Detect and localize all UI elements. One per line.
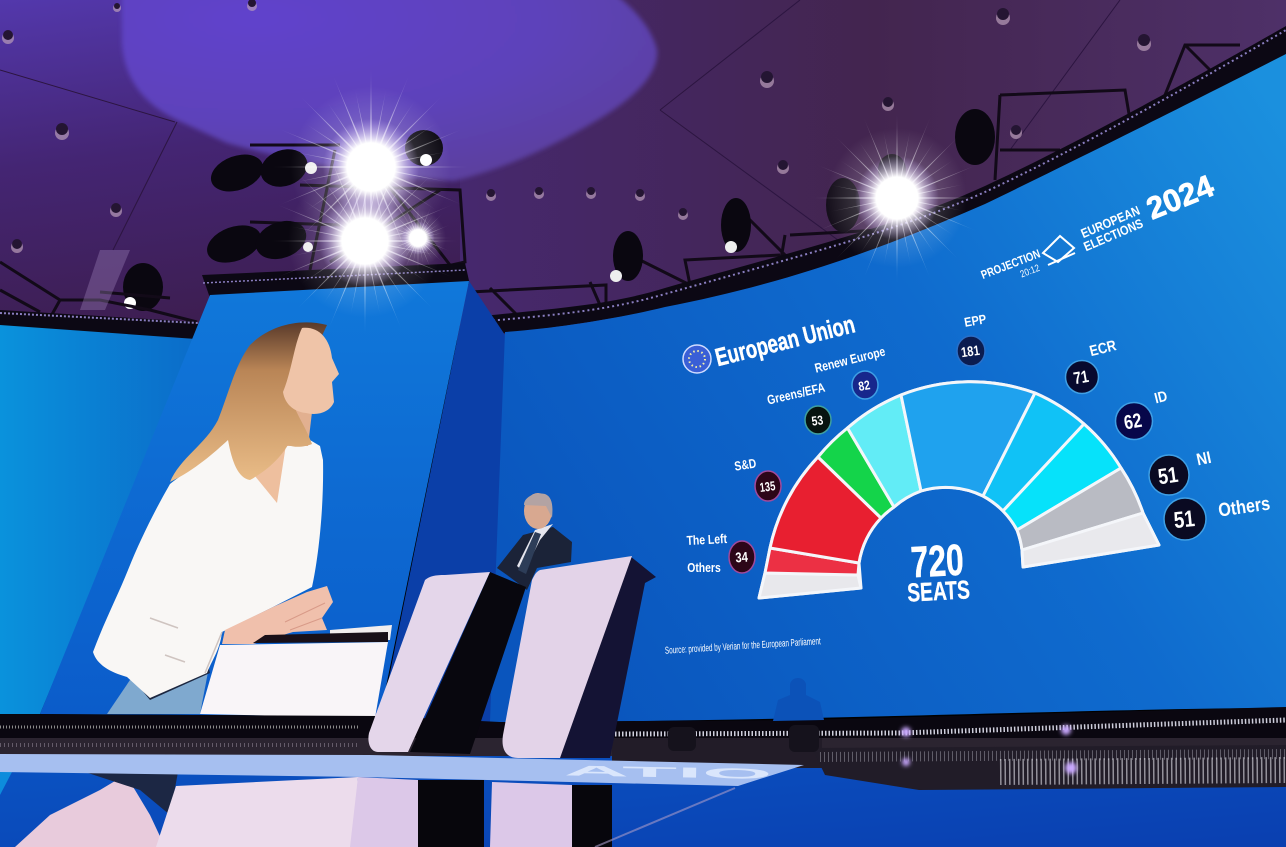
stage base strip [0, 707, 1286, 752]
lectern left [368, 572, 526, 754]
seats label: SEATS [906, 575, 971, 607]
projection time: 20:12 [1018, 262, 1041, 280]
light flares [269, 66, 984, 337]
source note: Source: provided by Verian for the European Parliament [665, 635, 821, 656]
ID: ID [1152, 387, 1169, 407]
Renew Europe: Renew Europe [813, 344, 887, 376]
header logo: European Elections 2024 [979, 168, 1219, 282]
segment: EPP [901, 382, 1035, 496]
segment: NI [1017, 468, 1143, 550]
Greens/EFA [766, 381, 831, 434]
LED strip on stage base [0, 720, 1286, 734]
Renew Europe [813, 344, 887, 399]
S&D [733, 456, 781, 501]
stage floor pucks [668, 725, 819, 752]
floor [0, 725, 1286, 847]
LED rail along the top of the screens [0, 26, 1286, 342]
Others right: Others [1217, 492, 1272, 521]
shadow of presenter on screen [773, 678, 824, 721]
chart base [759, 382, 1159, 598]
segment: Others right [1022, 513, 1159, 567]
elections wordmark: EUROPEAN [1079, 203, 1142, 241]
year: 2024 [1142, 168, 1219, 226]
segment: ID [1003, 424, 1121, 530]
presenter desk [200, 625, 392, 718]
total seats [906, 536, 971, 607]
stage lights: left rig [0, 130, 606, 322]
ceiling seams and spotlight holes [0, 0, 1151, 300]
presenter: woman [93, 322, 339, 714]
Others right [1164, 492, 1272, 540]
stage lights: right rig [610, 45, 1240, 285]
EPP: EPP [963, 311, 987, 330]
The Left: 34 [735, 549, 748, 566]
The Left [686, 532, 755, 573]
right screen [490, 54, 1286, 722]
segment: S&D [770, 457, 881, 563]
ceiling disc [122, 0, 657, 181]
segment: Renew Europe [848, 395, 921, 507]
elections wordmark: ELECTIONS [1081, 216, 1145, 254]
segment: Greens/EFA [818, 428, 894, 518]
party labels and seat badges [686, 311, 1272, 575]
S&D: S&D [733, 456, 757, 474]
Greens/EFA: 53 [811, 413, 825, 429]
Renew Europe: 82 [857, 378, 872, 394]
Others right: 51 [1173, 506, 1196, 534]
ID: 62 [1122, 409, 1144, 434]
floor glints [901, 725, 1077, 774]
ceiling background [0, 0, 1286, 340]
reversed floor text: OITA [564, 762, 772, 782]
man at lectern [497, 493, 572, 590]
icon: ballot box [1043, 236, 1075, 265]
chart title with EU icon [683, 310, 858, 373]
Others left: Others [687, 561, 721, 575]
left screen [0, 325, 196, 714]
title: European Union [712, 310, 858, 372]
seat count: 720 [910, 536, 965, 588]
dark blue screen strip [380, 281, 506, 722]
Greens/EFA: Greens/EFA [766, 381, 827, 408]
floor projection strip [0, 754, 804, 786]
centre screen with presenter [40, 281, 469, 718]
segment: The Left [765, 548, 859, 575]
hemicycle chart [759, 382, 1159, 598]
ID [1116, 387, 1169, 440]
NI: 51 [1156, 463, 1180, 490]
ECR: ECR [1088, 336, 1118, 359]
EPP: 181 [960, 343, 981, 361]
NI: NI [1195, 449, 1213, 470]
segment: Others left [759, 573, 861, 598]
NI [1149, 449, 1213, 495]
EPP [957, 311, 987, 366]
S&D: 135 [759, 480, 776, 495]
icon: EU flag circle [683, 345, 711, 373]
lectern right [503, 556, 656, 758]
The Left: The Left [686, 532, 727, 548]
floor reflections [0, 772, 735, 847]
ECR: 71 [1072, 367, 1091, 389]
projection label: PROJECTION [979, 247, 1042, 282]
segment: ECR [983, 393, 1084, 511]
ECR [1066, 336, 1118, 394]
